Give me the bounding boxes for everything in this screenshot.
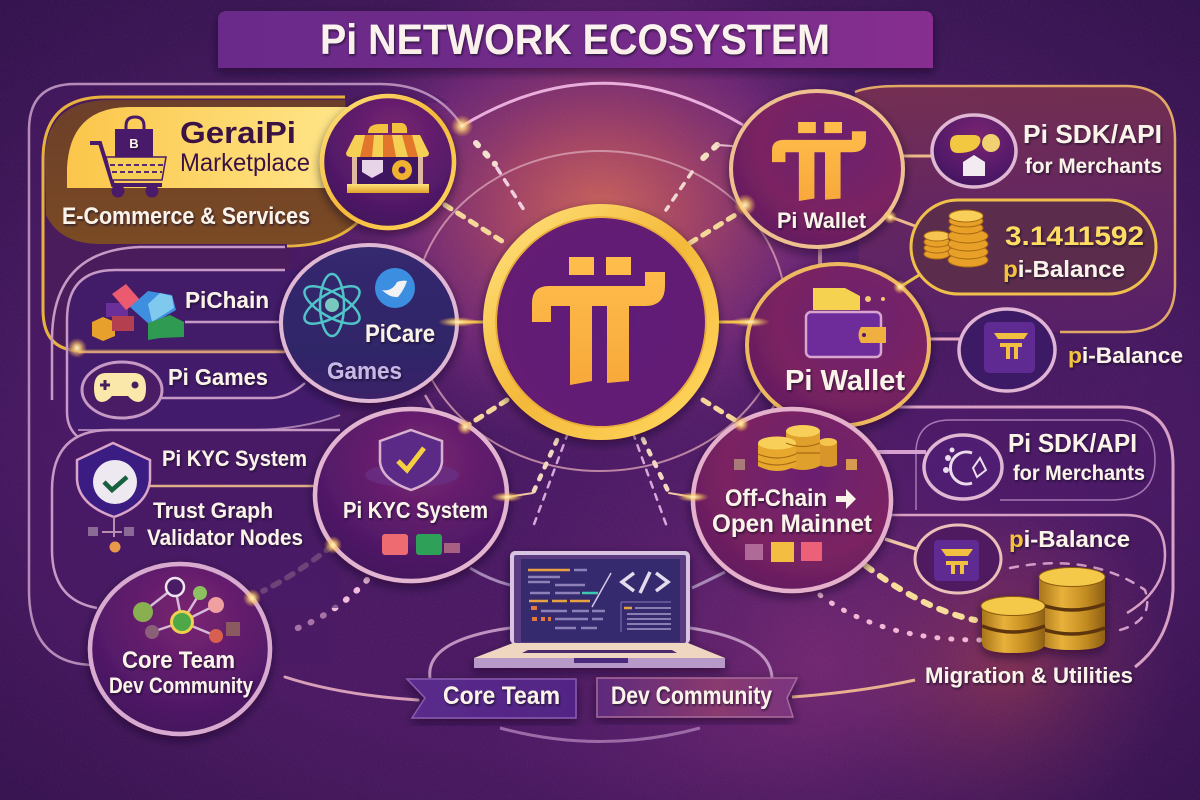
icon: shopping cart with bag: B xyxy=(129,136,139,151)
icon: laptop with code xyxy=(474,551,725,668)
panel: SDK and balance right upper xyxy=(855,86,1175,332)
solid connectors xyxy=(285,156,960,742)
icon: KYC shield xyxy=(365,430,459,490)
validator nodes label: Validator Nodes xyxy=(147,525,303,550)
icon: validator nodes xyxy=(88,517,134,552)
node: pi balance xyxy=(959,309,1055,391)
connector sparkles xyxy=(67,115,907,607)
wallet label: Pi Wallet xyxy=(785,365,905,397)
icon: wallet xyxy=(806,288,886,357)
arrow xyxy=(836,489,856,509)
icon: Pi symbol xyxy=(772,122,866,201)
icon: atom xyxy=(299,274,365,336)
core team label: Core Team xyxy=(443,682,560,710)
icon: pi token xyxy=(934,540,979,581)
Pi Games label: Pi Games xyxy=(168,364,268,390)
hub: central Pi logo xyxy=(490,211,712,433)
panel: right lower xyxy=(880,407,1173,667)
node: Pi KYC xyxy=(315,409,507,581)
balance label: pi-Balance xyxy=(1003,256,1125,282)
wallet label: Pi Wallet xyxy=(777,208,867,233)
status squares xyxy=(745,542,822,562)
panel: outer left frame xyxy=(29,84,462,665)
icon: large gold coin cylinders xyxy=(981,568,1105,653)
merchants label: for Merchants xyxy=(1025,155,1162,178)
icon: coin stacks xyxy=(924,210,988,267)
dotted connectors xyxy=(263,143,1147,640)
icon: pi token xyxy=(984,322,1035,373)
icon: blocks xyxy=(92,284,184,341)
off-chain label: Off-Chain xyxy=(725,485,827,512)
marketplace subtitle: Marketplace xyxy=(180,149,310,177)
pill: Pi balance amount xyxy=(911,200,1156,294)
icon: merchant chat and shop xyxy=(950,134,1000,176)
merchants second label: for Merchants xyxy=(1013,462,1145,485)
SDK second label: Pi SDK/API xyxy=(1008,428,1137,458)
panel: GeraiPi marketplace xyxy=(43,97,360,351)
panel: Pi KYC and trust graph xyxy=(52,430,340,608)
title banner xyxy=(218,11,933,68)
title: Pi NETWORK ECOSYSTEM xyxy=(320,16,830,64)
ribbon: Dev Community xyxy=(597,678,797,717)
icon: cubes xyxy=(382,534,460,555)
open mainnet label: Open Mainnet xyxy=(712,510,873,538)
KYC label: Pi KYC System xyxy=(162,446,307,471)
node: Pi Wallet xyxy=(747,264,929,426)
node: off-chain to mainnet xyxy=(693,409,891,591)
icon: Pi symbol xyxy=(532,257,665,385)
PiChain label: PiChain xyxy=(185,287,269,313)
migration label: Migration & Utilities xyxy=(925,663,1133,688)
marketplace yellow label xyxy=(67,107,350,188)
panel: PiChain and Pi Games xyxy=(52,247,340,437)
icon: crescent gears xyxy=(943,448,986,484)
icon: shield with check xyxy=(77,443,150,517)
pi balance second label: pi-Balance xyxy=(1009,526,1130,552)
node: core team xyxy=(90,564,270,734)
dev community label: Dev Community xyxy=(611,682,772,710)
KYC node label: Pi KYC System xyxy=(343,497,488,523)
icon: game controller xyxy=(82,362,162,418)
icon: shopping cart with bag xyxy=(90,117,166,198)
node: store xyxy=(322,96,454,228)
balance figure: 3.1411592 xyxy=(1005,221,1144,251)
icon: blue badge xyxy=(375,268,415,308)
e-commerce label: E-Commerce & Services xyxy=(62,203,310,230)
ribbon: Core Team xyxy=(407,679,576,718)
SDK label: Pi SDK/API xyxy=(1023,119,1162,149)
node: SDK for merchants xyxy=(932,115,1016,187)
node: PiCare and games xyxy=(281,245,457,401)
node: Pi Wallet logo xyxy=(731,91,903,247)
node: pi balance second xyxy=(915,525,1001,593)
pi balance label: pi-Balance xyxy=(1068,343,1183,368)
games label: Games xyxy=(327,358,402,385)
icon: storefront xyxy=(346,123,429,193)
orbit arcs around the hub xyxy=(414,83,786,471)
node: SDK second xyxy=(924,435,1002,499)
PiCare label: PiCare xyxy=(365,320,435,348)
icon: coin stacks xyxy=(734,425,857,471)
code lines xyxy=(528,570,671,632)
icon: network graph xyxy=(133,578,240,643)
marketplace name: GeraiPi xyxy=(180,115,296,150)
dev community label: Dev Community xyxy=(109,673,254,698)
core team label: Core Team xyxy=(122,647,235,674)
trust graph label: Trust Graph xyxy=(153,498,273,523)
